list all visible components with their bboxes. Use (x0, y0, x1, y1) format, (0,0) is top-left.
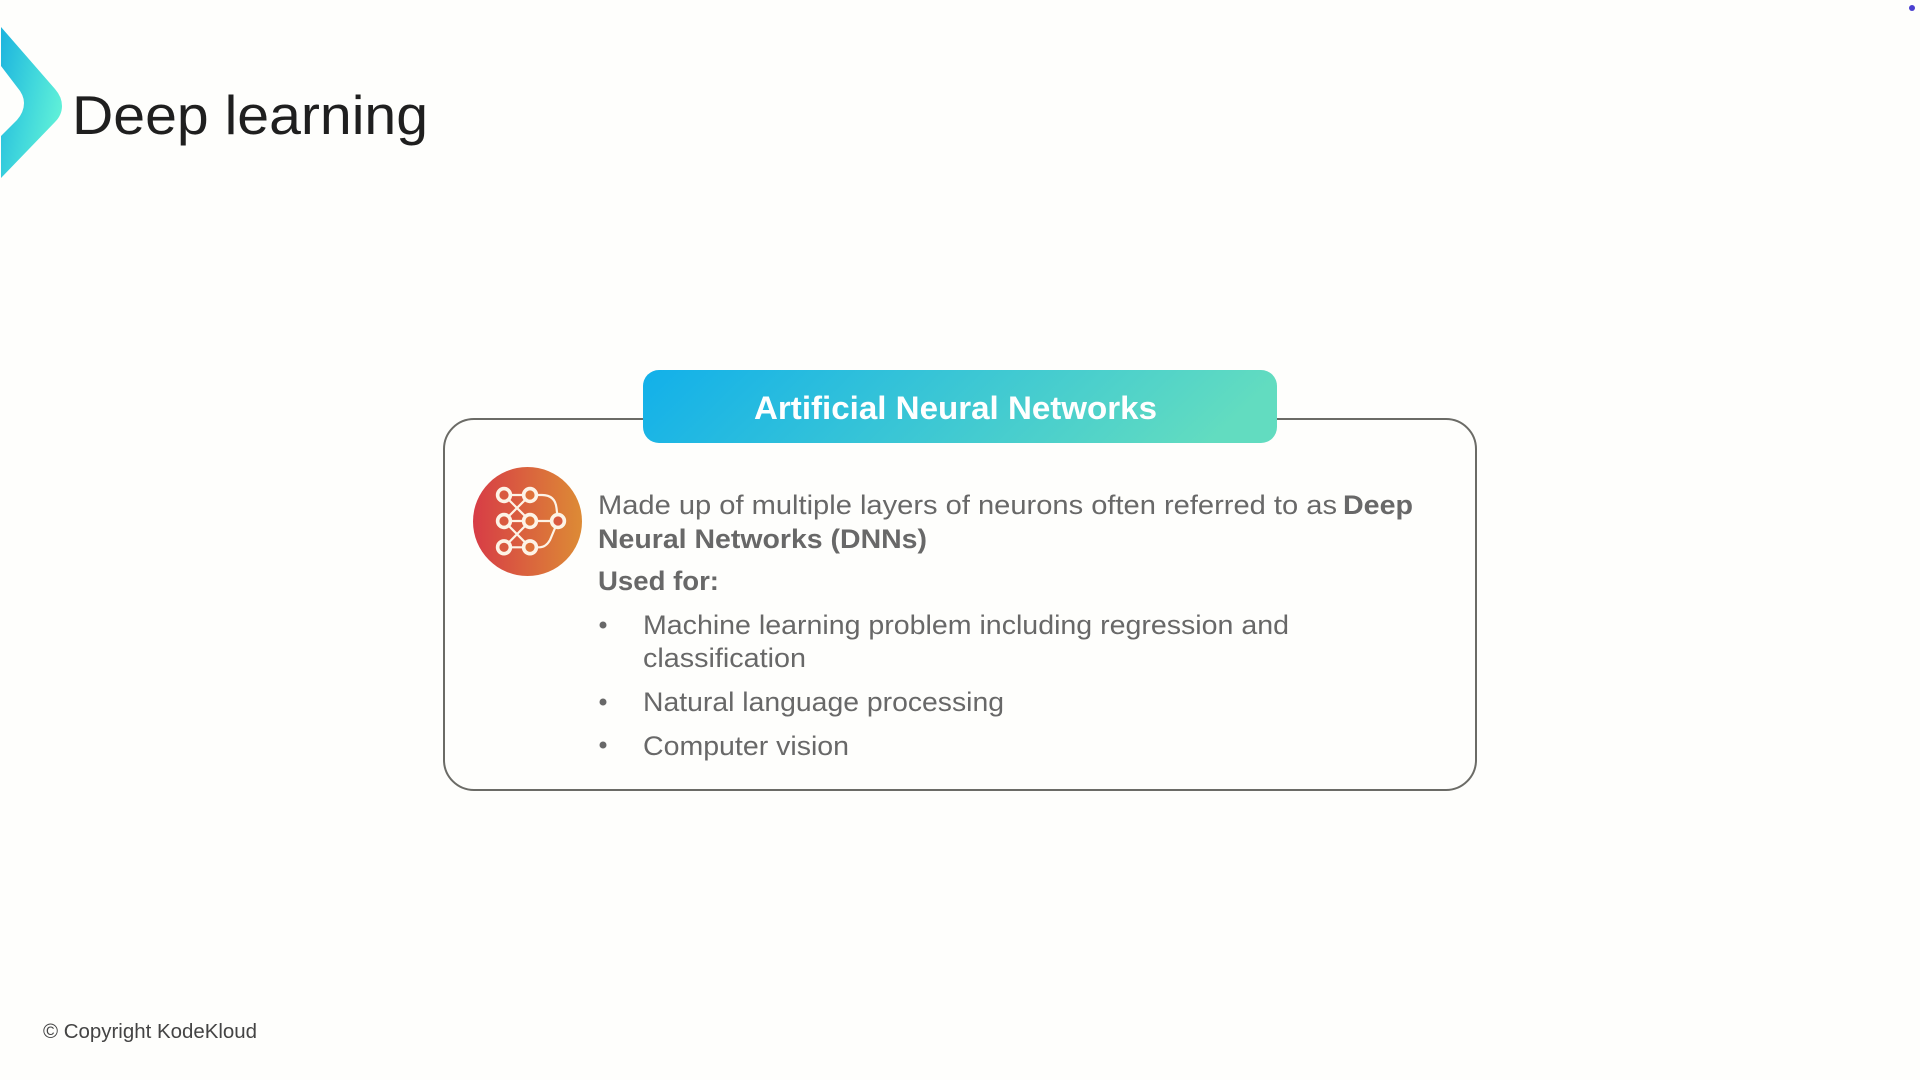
panel header (643, 370, 1277, 443)
panel header: Artificial Neural Networks (754, 390, 1157, 426)
title: Deep learning (72, 84, 428, 146)
description text: Neural Networks (DNNs) (598, 524, 927, 554)
bullet: computer vision: Computer vision (643, 731, 849, 761)
footer copyright: © Copyright KodeKloud (43, 1021, 257, 1043)
icon: corner dot (1909, 5, 1915, 11)
bullet: machine learning: classification (643, 643, 806, 673)
bullet: machine learning: Machine learning problem including regression and (643, 610, 1289, 640)
bullet: natural language processing: Natural language processing (643, 687, 1004, 717)
bullet: machine learning (600, 610, 1289, 673)
used for heading: Used for: (598, 566, 719, 596)
description text: Made up of multiple layers of neurons often referred to as (598, 490, 1337, 520)
bullet list (600, 610, 1289, 761)
panel outline (444, 419, 1476, 790)
icon: neural network (473, 467, 582, 576)
description text (598, 490, 1413, 554)
description text: Deep (1343, 490, 1413, 520)
panel: artificial neural networks (444, 370, 1476, 790)
icon: corner chevron logo (1, 27, 62, 178)
